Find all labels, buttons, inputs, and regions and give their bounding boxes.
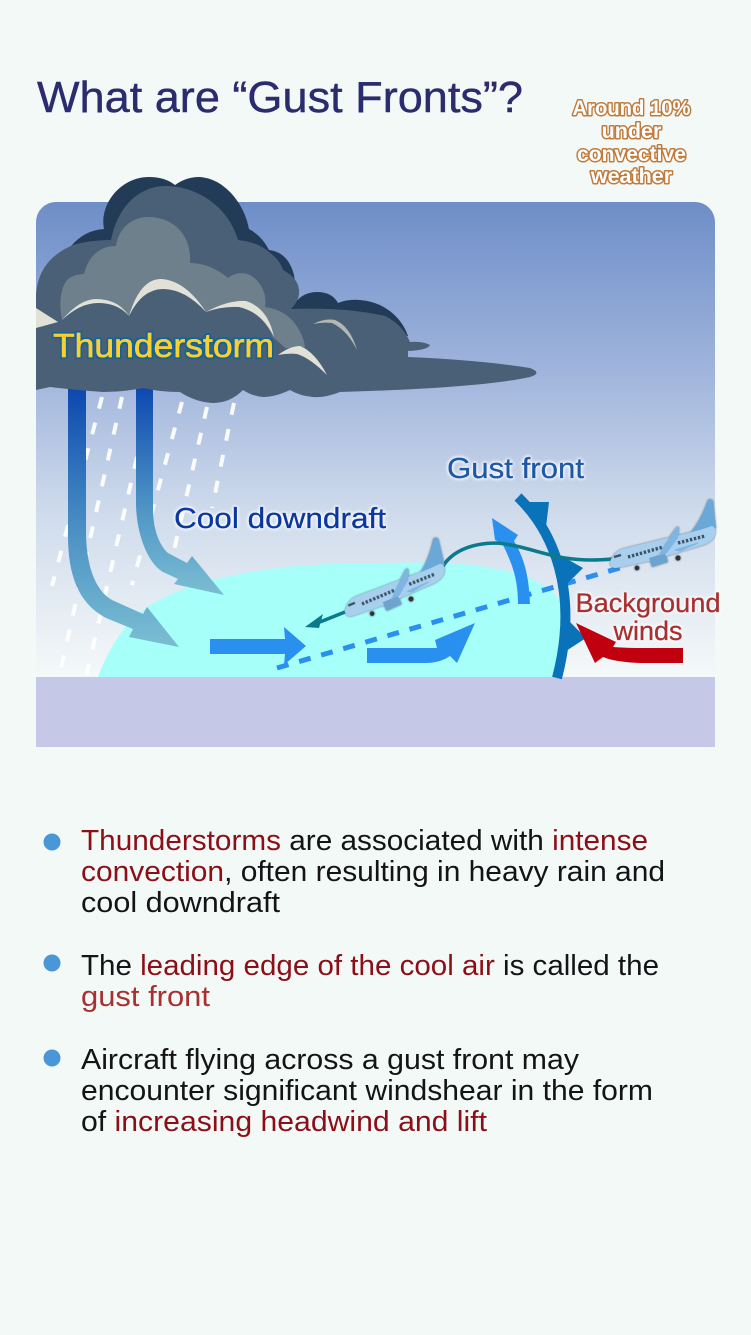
arrow: downdraft right (136, 388, 224, 595)
label: Cool downdraft: Cool downdraft (174, 503, 386, 535)
cloud dark back right (291, 292, 408, 340)
arrow: downdraft left (68, 388, 179, 647)
icon: aircraft approaching (610, 499, 716, 570)
label: Background winds: winds (612, 616, 683, 646)
label: Background winds: Background (576, 588, 720, 618)
sky background (36, 202, 715, 680)
panel: gust front diagram (36, 177, 720, 747)
callout: around 10% under convective weather: under (602, 119, 662, 143)
cloud front lobe (60, 289, 290, 380)
bullet: windshear: of increasing headwind and lift (81, 1106, 487, 1138)
cool air dome (98, 562, 567, 677)
callout: around 10% under convective weather (572, 96, 690, 188)
bullet: thunderstorms: Thunderstorms are associated with intense (81, 825, 648, 857)
label: Gust front: Gust front (447, 453, 584, 485)
thunderstorm cloud (36, 177, 536, 403)
dashed straight flight path (277, 567, 623, 668)
cloud dark back (71, 177, 300, 320)
bullet: thunderstorms (44, 825, 665, 919)
ground (36, 677, 715, 747)
cloud mid body (36, 186, 536, 403)
label: Background winds (576, 588, 720, 646)
rain streaks (52, 397, 234, 677)
icon: aircraft inside gust front (337, 537, 450, 619)
bullet: thunderstorms: cool downdraft (81, 887, 280, 919)
arrow: background winds (576, 623, 683, 663)
bullet: thunderstorms: convection, often resulting in heavy rain and (81, 856, 665, 888)
arrow: lift at gust front (492, 518, 530, 604)
bullet: windshear (44, 1044, 653, 1138)
callout: around 10% under convective weather: convective (577, 142, 686, 166)
label: Thunderstorm: Thunderstorm (53, 327, 274, 364)
bullet: leading edge: gust front (81, 981, 210, 1013)
callout: around 10% under convective weather: weather (590, 164, 673, 188)
gust front line with barbs (518, 497, 586, 678)
cloud light billow (60, 217, 305, 350)
title: What are “Gust Fronts”? (37, 73, 523, 122)
callout: around 10% under convective weather: Around 10% (572, 96, 690, 120)
bullet: leading edge (44, 950, 659, 1013)
bullet: windshear: encounter significant windshear in the form (81, 1075, 653, 1107)
cloud highlights (36, 279, 357, 375)
bullet: leading edge: The leading edge of the cool air is called the (81, 950, 659, 982)
bullet: windshear: Aircraft flying across a gust front may (81, 1044, 580, 1076)
arrow: cool outflow straight (210, 627, 306, 665)
actual flight path with descent arrow (305, 543, 613, 628)
arrow: cool outflow curving up (367, 623, 475, 663)
